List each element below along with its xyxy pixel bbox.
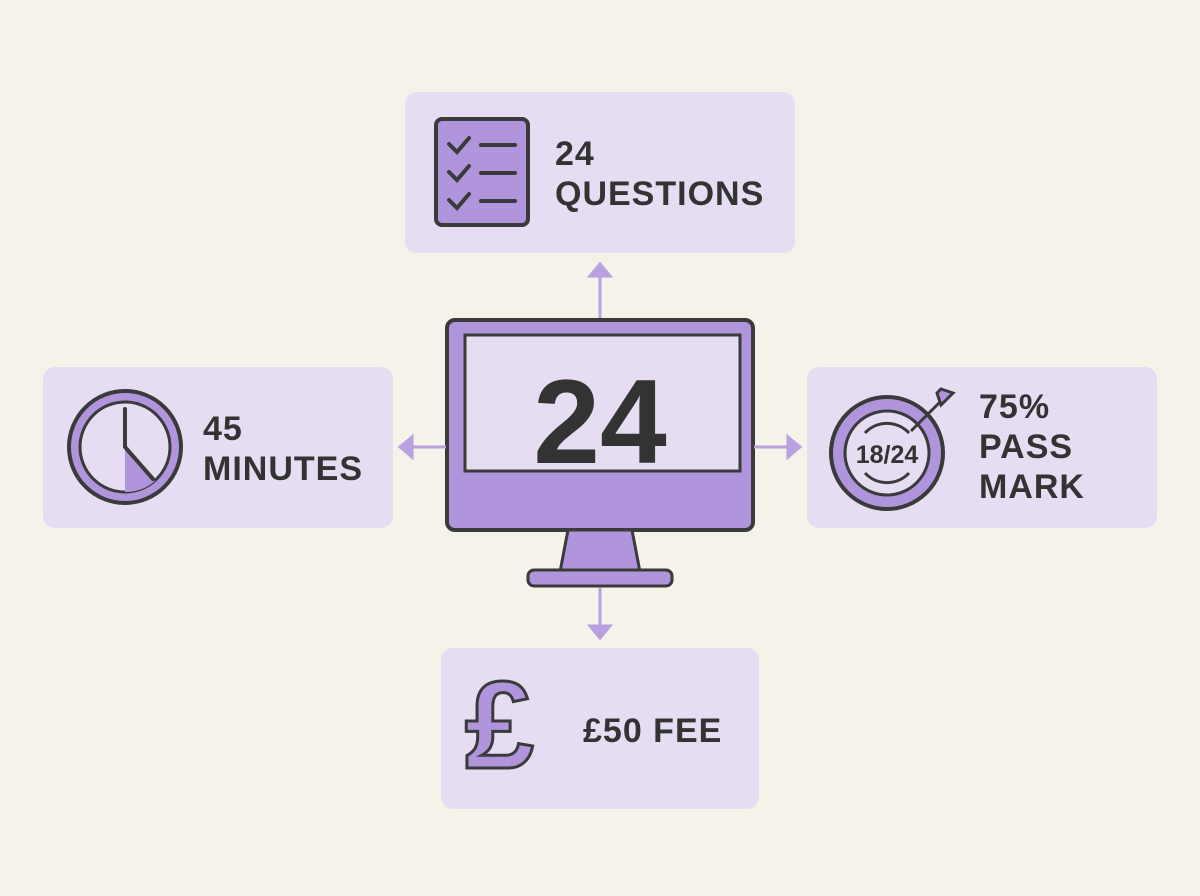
icon: pound: £ <box>465 657 534 795</box>
panel: questions <box>405 92 795 253</box>
text: 45 minutes: 45 <box>203 410 243 448</box>
icon: target 18/24 <box>829 387 956 511</box>
icon: clock <box>67 389 183 505</box>
panel: pass mark <box>807 367 1157 528</box>
text: 75% pass mark: MARK <box>979 468 1085 506</box>
text: fee: £50 FEE <box>583 712 722 750</box>
text: 75% pass mark: 75% <box>979 388 1050 426</box>
icon: checklist <box>434 117 530 227</box>
icon: target 18/24: 18/24 <box>856 441 918 469</box>
text: 24 questions <box>555 135 764 213</box>
text: 75% pass mark <box>979 388 1085 506</box>
monitor <box>445 318 755 588</box>
text: 24 questions: 24 <box>555 135 595 173</box>
monitor: 24 <box>533 355 667 489</box>
text: 75% pass mark: PASS <box>979 428 1073 466</box>
text: 45 minutes <box>203 410 363 488</box>
text: 45 minutes: MINUTES <box>203 450 363 488</box>
panel: minutes <box>43 367 393 528</box>
panel: fee <box>441 648 759 809</box>
text: 24 questions: QUESTIONS <box>555 175 764 213</box>
